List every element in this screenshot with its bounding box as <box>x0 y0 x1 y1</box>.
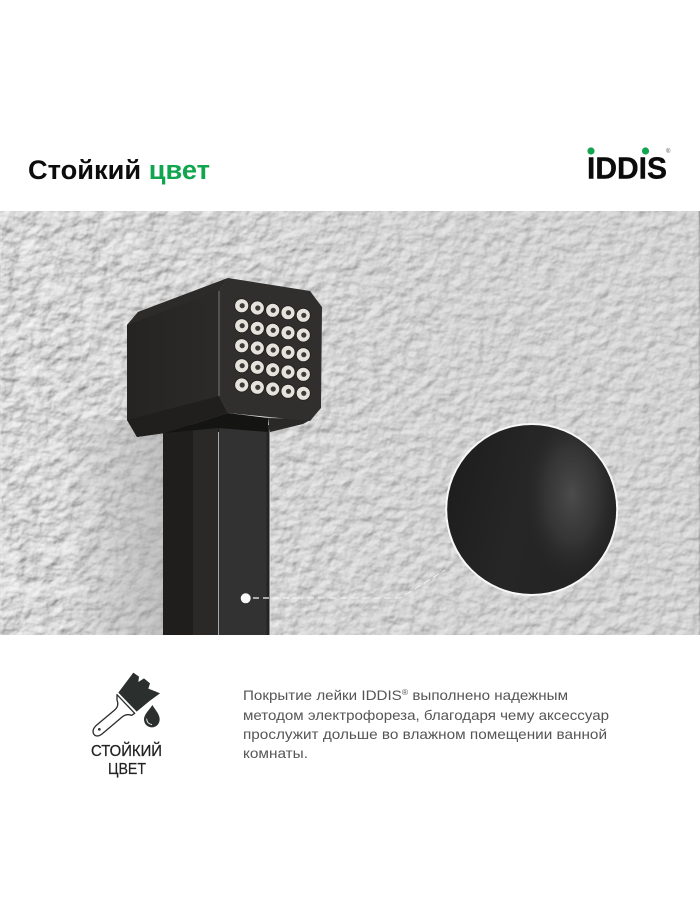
icon label: ЦВЕТ <box>108 761 146 778</box>
description text: методом электрофореза, благодаря чему аксессуар <box>243 707 609 723</box>
description text <box>243 687 609 761</box>
icon: paint brush with drop <box>93 673 160 736</box>
title: Стойкий цвет <box>28 155 210 185</box>
logo: IDDIS: IDDIS <box>587 150 667 186</box>
wall texture <box>0 200 700 650</box>
icon label: СТОЙКИЙ <box>91 742 162 760</box>
brush bristles <box>118 673 160 712</box>
description text: Покрытие лейки IDDIS <box>243 687 390 703</box>
shower head <box>127 278 322 437</box>
head front <box>219 278 322 421</box>
icon label <box>91 742 162 778</box>
brush handle <box>93 695 135 736</box>
description text: прослужит дольше во влажном помещении ванной <box>243 726 607 742</box>
head side <box>127 278 228 437</box>
description text: выполнено надежным <box>408 687 568 703</box>
nozzles <box>235 299 310 400</box>
callout pointer: dot and dashed line <box>241 570 445 603</box>
description text: ® <box>402 688 408 697</box>
photo panel: textured wall with shower head <box>0 200 700 650</box>
shower stem <box>163 425 270 635</box>
paint drop <box>144 705 160 727</box>
description text: комнаты. <box>243 745 308 761</box>
callout: black finish swatch <box>445 423 618 596</box>
logo: IDDIS: ® <box>666 148 671 155</box>
